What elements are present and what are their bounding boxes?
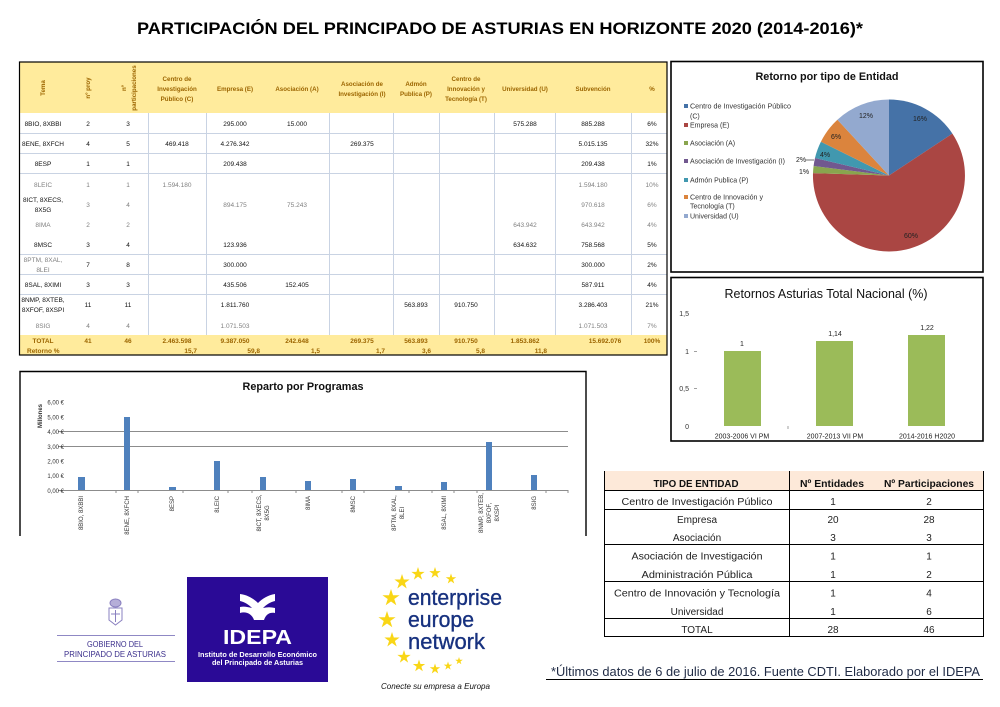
entity table rows xyxy=(614,497,935,636)
entity table rows: 4 xyxy=(926,588,932,600)
table body rows: 8XFOF, 8XSPI xyxy=(22,307,64,314)
bar chart x axis labels: 2003-2006 VI PM xyxy=(715,434,769,440)
logo: Enterprise Europe Network: Conecte su empresa a Europa xyxy=(381,681,490,691)
table body rows: 758.568 xyxy=(581,242,605,249)
bars xyxy=(724,335,945,426)
programme chart y axis labels: Millones xyxy=(38,403,44,428)
logo: IDEPA: del Principado de Asturias xyxy=(212,660,303,667)
table body rows: 3 xyxy=(126,121,130,128)
table body rows: 8BIO, 8XBBI xyxy=(25,121,62,128)
programme chart x axis labels xyxy=(79,493,538,535)
table body rows: 2% xyxy=(647,262,657,269)
programme chart x axis labels: 8LEI xyxy=(400,506,406,519)
table header row: Asociación (A) xyxy=(275,86,319,93)
entity table rows: 1 xyxy=(830,588,836,600)
table body rows: 8X5G xyxy=(35,207,51,214)
entity table rows: 2 xyxy=(926,497,932,508)
table header row: Tecnología (T) xyxy=(445,96,487,103)
entity table rows: 3 xyxy=(926,533,932,544)
programme chart y axis labels: 1,00 € xyxy=(47,474,65,480)
programme chart x axis labels: 8ICT, 8XECS, xyxy=(257,494,263,532)
bar value labels: 1 xyxy=(740,341,744,348)
entity table header xyxy=(654,478,974,490)
table total row: 910.750 xyxy=(454,338,478,345)
programme chart x axis labels: 8SIG xyxy=(532,496,538,510)
pie chart value labels: 60% xyxy=(904,233,918,240)
entity table rows: 2 xyxy=(926,570,932,581)
table body rows: 8ENE, 8XFCH xyxy=(22,141,64,148)
entity table rows: Administración Pública xyxy=(642,570,753,581)
table body rows: 910.750 xyxy=(454,302,478,309)
table body rows: 587.911 xyxy=(581,282,605,289)
table total row: 41 xyxy=(84,338,92,345)
table body rows: 3 xyxy=(126,282,130,289)
panel: distribution by programme chart xyxy=(20,372,586,536)
bar chart y axis: 0,5 xyxy=(679,386,689,393)
table body rows: 4% xyxy=(647,222,657,229)
table body rows: 10% xyxy=(645,182,659,189)
table body rows: 123.936 xyxy=(223,242,247,249)
table body rows: 1 xyxy=(86,161,90,168)
bar chart y axis: 1,5 xyxy=(679,311,689,318)
table body rows: 1.594.180 xyxy=(163,182,192,189)
pie chart value labels: 6% xyxy=(831,134,841,141)
table return percentage row: Retorno % xyxy=(27,348,60,355)
icon: Asturias crest xyxy=(109,599,122,625)
table body rows: 885.288 xyxy=(581,121,605,128)
entity table rows: 1 xyxy=(830,552,836,562)
table header row: Centro de xyxy=(163,76,192,83)
table body rows: 1.811.760 xyxy=(221,302,250,309)
table return percentage row: 1,5 xyxy=(311,348,320,355)
pie chart value labels: 16% xyxy=(913,116,927,123)
pie chart legend xyxy=(684,104,791,220)
table return percentage row: 3,6 xyxy=(422,348,431,355)
table body rows: 7 xyxy=(86,262,90,269)
table total row: 9.387.050 xyxy=(221,338,250,345)
programme chart x axis labels: 8XFOF, xyxy=(487,503,493,523)
pie chart legend: Tecnología (T) xyxy=(690,204,735,210)
logo: Gobierno del Principado de Asturias: PRINCIPADO DE ASTURIAS xyxy=(64,650,166,659)
table total row: 242.648 xyxy=(285,338,309,345)
table body rows: 11 xyxy=(125,302,132,309)
table return percentage row: 11,8 xyxy=(535,348,547,355)
table body rows: 435.506 xyxy=(223,282,247,289)
pie chart value labels: 2% xyxy=(796,157,806,164)
bar chart x axis labels: 2014-2016 H2020 xyxy=(899,434,955,440)
table body rows: 4% xyxy=(647,282,657,289)
entity table rows: 3 xyxy=(830,533,836,544)
logo: Enterprise Europe Network xyxy=(378,567,502,691)
table body rows: 8LEI xyxy=(36,267,50,274)
logo: IDEPA: IDEPA xyxy=(223,627,292,649)
table body rows: 4 xyxy=(126,202,130,209)
pie chart legend: Universidad (U) xyxy=(690,214,739,220)
logo: IDEPA xyxy=(187,577,328,682)
programme chart title: Reparto por Programas xyxy=(242,381,364,393)
table header row: % xyxy=(649,86,655,93)
table body rows: 894.175 xyxy=(223,202,247,209)
table body rows: 4 xyxy=(86,141,90,148)
table body rows: 7% xyxy=(647,323,657,330)
pie chart legend: Asociación (A) xyxy=(690,140,735,148)
table body rows xyxy=(21,121,659,330)
entity table rows: TOTAL xyxy=(681,625,713,636)
table header row: Publica (P) xyxy=(400,91,432,98)
panel: pie chart return by entity type xyxy=(671,62,983,272)
table body rows: 3 xyxy=(86,242,90,249)
pie chart legend: Admón Publica (P) xyxy=(690,178,748,184)
entity table rows: 20 xyxy=(827,515,839,526)
programme chart x axis labels: 8MSC xyxy=(351,495,357,513)
programme chart y axis labels xyxy=(38,400,65,495)
table total row: 15.692.076 xyxy=(589,338,622,345)
programme chart y axis labels: 4,00 € xyxy=(47,430,65,436)
table total row: TOTAL xyxy=(32,338,54,345)
pie chart slices xyxy=(813,100,965,251)
bar value labels: 1,22 xyxy=(920,325,934,332)
table body rows: 1.594.180 xyxy=(579,182,608,189)
table header row: Empresa (E) xyxy=(217,86,253,93)
pie chart legend: Asociación de Investigación (I) xyxy=(690,158,785,166)
entity table rows: 6 xyxy=(926,607,932,618)
bar chart y axis: 0 xyxy=(685,424,689,431)
table body rows: 4 xyxy=(126,323,130,330)
entity table rows: 1 xyxy=(830,607,836,618)
pie chart value labels xyxy=(796,113,927,240)
table total row: 46 xyxy=(124,338,132,345)
table return percentage row xyxy=(27,348,547,355)
entity table rows: Centro de Innovación y Tecnología xyxy=(614,588,780,600)
table header row: Investigación xyxy=(157,86,197,93)
programme bars xyxy=(78,417,537,490)
table total row xyxy=(32,338,661,345)
table return percentage row: 5,8 xyxy=(476,348,485,355)
programme chart y axis labels: 2,00 € xyxy=(47,460,65,466)
programme chart y axis labels: 3,00 € xyxy=(47,445,65,451)
bar chart y axis: 1 xyxy=(685,349,689,356)
table return percentage row: 15,7 xyxy=(184,348,197,355)
entity table rows: Asociación xyxy=(673,533,721,544)
table body rows: 8ESP xyxy=(35,161,51,168)
table body rows: 469.418 xyxy=(165,141,189,148)
programme chart x axis labels: 8X5G xyxy=(265,505,271,521)
entity table rows: Empresa xyxy=(677,515,717,526)
table body rows: 209.438 xyxy=(581,161,605,168)
table body rows: 563.893 xyxy=(404,302,428,309)
table header row xyxy=(40,65,655,111)
table body rows: 4 xyxy=(86,323,90,330)
table body rows: 4 xyxy=(126,242,130,249)
table header row: Universidad (U) xyxy=(502,86,548,93)
programme chart x axis labels: 8ESP xyxy=(170,496,176,511)
table body rows: 1.071.503 xyxy=(579,323,608,330)
table body rows: 8ICT, 8XECS, xyxy=(23,197,63,204)
table total row: 269.375 xyxy=(350,338,374,345)
table body rows: 1.071.503 xyxy=(221,323,250,330)
table body rows: 32% xyxy=(645,141,659,148)
table body rows: 8 xyxy=(126,262,130,269)
table body rows: 300.000 xyxy=(223,262,247,269)
bar chart x axis labels xyxy=(715,434,955,440)
table body rows: 634.632 xyxy=(513,242,537,249)
entity table header: Nº Participaciones xyxy=(884,478,974,490)
programme chart x axis labels: 8IMA xyxy=(306,496,312,510)
bar chart title: Retornos Asturias Total Nacional (%) xyxy=(724,286,928,301)
entity table rows: 46 xyxy=(923,625,935,636)
bar value labels: 1,14 xyxy=(828,331,842,338)
table body rows: 1 xyxy=(86,182,90,189)
table total row: 100% xyxy=(644,338,661,345)
table body rows: 970.618 xyxy=(581,202,605,209)
entity table rows: Universidad xyxy=(671,607,723,618)
title: PARTICIPACIÓN DEL PRINCIPADO DE ASTURIAS EN HORIZONTE 2020 (2014-2016)* xyxy=(137,19,863,38)
programme chart x axis labels: 8BIO, 8XBBI xyxy=(79,496,85,530)
table body rows: 2 xyxy=(86,222,90,229)
programme chart x axis labels: 8SAL, 8XIMI xyxy=(442,496,448,530)
bar chart y axis xyxy=(679,311,788,431)
table body rows: 3 xyxy=(86,282,90,289)
logo: IDEPA: Instituto de Desarrollo Económico xyxy=(198,652,317,659)
pie chart legend: Empresa (E) xyxy=(690,122,729,130)
entity table rows: Asociación de Investigación xyxy=(632,552,762,562)
table body rows: 4.276.342 xyxy=(221,141,250,148)
programme chart x axis labels: 8PTM, 8XAL, xyxy=(392,495,398,531)
pie chart legend: Centro de Innovación y xyxy=(690,194,763,202)
programme chart y axis labels: 5,00 € xyxy=(47,416,65,422)
icon: IDEPA emblem xyxy=(240,594,275,620)
programme chart x axis labels: 8ENE, 8XFCH xyxy=(125,496,131,535)
logo: Enterprise Europe Network: enterprise xyxy=(408,585,502,610)
table total row: 2.463.598 xyxy=(163,338,192,345)
pie chart title: Retorno por tipo de Entidad xyxy=(756,71,898,83)
icon: ring of stars xyxy=(378,567,463,673)
table body rows: 1% xyxy=(647,161,657,168)
table body rows: 75.243 xyxy=(287,202,307,209)
table header row: participaciones xyxy=(131,65,138,111)
table return percentage row: 59,8 xyxy=(247,348,260,355)
table body rows: 643.942 xyxy=(513,222,537,229)
table body rows: 5% xyxy=(647,242,657,249)
table body rows: 295.000 xyxy=(223,121,247,128)
entity table rows: 1 xyxy=(830,497,836,508)
table body rows: 152.405 xyxy=(285,282,309,289)
entity table rows: 1 xyxy=(926,552,932,562)
table body rows: 2 xyxy=(86,121,90,128)
entity table rows: 1 xyxy=(830,570,836,581)
table body rows: 3.286.403 xyxy=(579,302,608,309)
table body rows: 15.000 xyxy=(287,121,307,128)
table body rows: 8PTM, 8XAL, xyxy=(24,257,63,264)
pie chart value labels: 1% xyxy=(799,169,809,176)
logo: Gobierno del Principado de Asturias: GOBIERNO DEL xyxy=(87,640,144,649)
table body rows: 8SAL, 8XIMI xyxy=(25,282,61,289)
table header row: Tema xyxy=(40,80,47,96)
pie chart value labels: 4% xyxy=(820,152,830,159)
table header row: nº proy xyxy=(85,77,92,99)
pie chart value labels: 12% xyxy=(859,113,873,120)
table body rows: 8MSC xyxy=(34,242,52,249)
table header row: Investigación (I) xyxy=(338,91,386,98)
panel: entity type table xyxy=(604,471,984,637)
table return percentage row: 1,7 xyxy=(376,348,385,355)
logo: Gobierno del Principado de Asturias xyxy=(57,599,175,662)
programme chart y axis labels: 0,00 € xyxy=(47,489,65,495)
entity table header: Nº Entidades xyxy=(800,478,864,490)
table body rows: 643.942 xyxy=(581,222,605,229)
table header row: Asociación de xyxy=(341,81,384,88)
table body rows: 209.438 xyxy=(223,161,247,168)
table body rows: 1 xyxy=(126,182,130,189)
programme chart x axis labels: 8XSPI xyxy=(495,504,501,522)
table body rows: 21% xyxy=(645,302,659,309)
table body rows: 2 xyxy=(126,222,130,229)
table header row: nº xyxy=(121,84,128,91)
programme chart x axis labels: 8LEIC xyxy=(215,495,221,513)
programme chart y axis labels: 6,00 € xyxy=(47,400,65,406)
table body rows: 269.375 xyxy=(350,141,374,148)
footnote: *Últimos datos de 6 de julio de 2016. Fuente CDTI. Elaborado por el IDEPA xyxy=(551,664,981,679)
table body rows: 5 xyxy=(126,141,130,148)
bar value labels xyxy=(740,325,934,348)
table total row: 1.853.862 xyxy=(511,338,540,345)
table header row: Subvención xyxy=(575,86,611,93)
table body rows: 3 xyxy=(86,202,90,209)
entity table rows: Centro de Investigación Público xyxy=(622,497,773,508)
programme chart x axis labels: 8NMP, 8XTEB, xyxy=(479,493,485,533)
bar chart x axis labels: 2007-2013 VII PM xyxy=(807,434,863,440)
table body rows: 575.288 xyxy=(513,121,537,128)
table body rows: 8IMA xyxy=(35,222,51,229)
table body rows: 300.000 xyxy=(581,262,605,269)
table header row: Innovación y xyxy=(447,86,485,93)
logo: Enterprise Europe Network: europe xyxy=(408,607,474,632)
table body rows: 1 xyxy=(126,161,130,168)
table header row: Admón xyxy=(405,81,427,88)
panel: main data table xyxy=(19,62,667,355)
table total row: 563.893 xyxy=(404,338,428,345)
pie chart legend: Centro de Investigación Público xyxy=(690,104,791,110)
table body rows: 6% xyxy=(647,202,657,209)
entity table rows: 28 xyxy=(923,515,935,526)
table body rows: 8LEIC xyxy=(34,182,52,189)
gridlines and axis xyxy=(58,432,568,493)
table header row: Centro de xyxy=(452,76,481,83)
table body rows: 8NMP, 8XTEB, xyxy=(21,297,65,304)
logo: Enterprise Europe Network: network xyxy=(408,629,486,654)
entity table rows: 28 xyxy=(827,625,839,636)
table body rows: 6% xyxy=(647,121,657,128)
table body rows: 11 xyxy=(85,302,92,309)
panel: national returns bar chart xyxy=(671,278,983,441)
pie chart legend: (C) xyxy=(690,114,700,120)
table body rows: 8SIG xyxy=(36,323,50,330)
entity table header: TIPO DE ENTIDAD xyxy=(654,478,739,490)
table header row: Público (C) xyxy=(161,96,193,103)
table body rows: 5.015.135 xyxy=(579,141,608,148)
